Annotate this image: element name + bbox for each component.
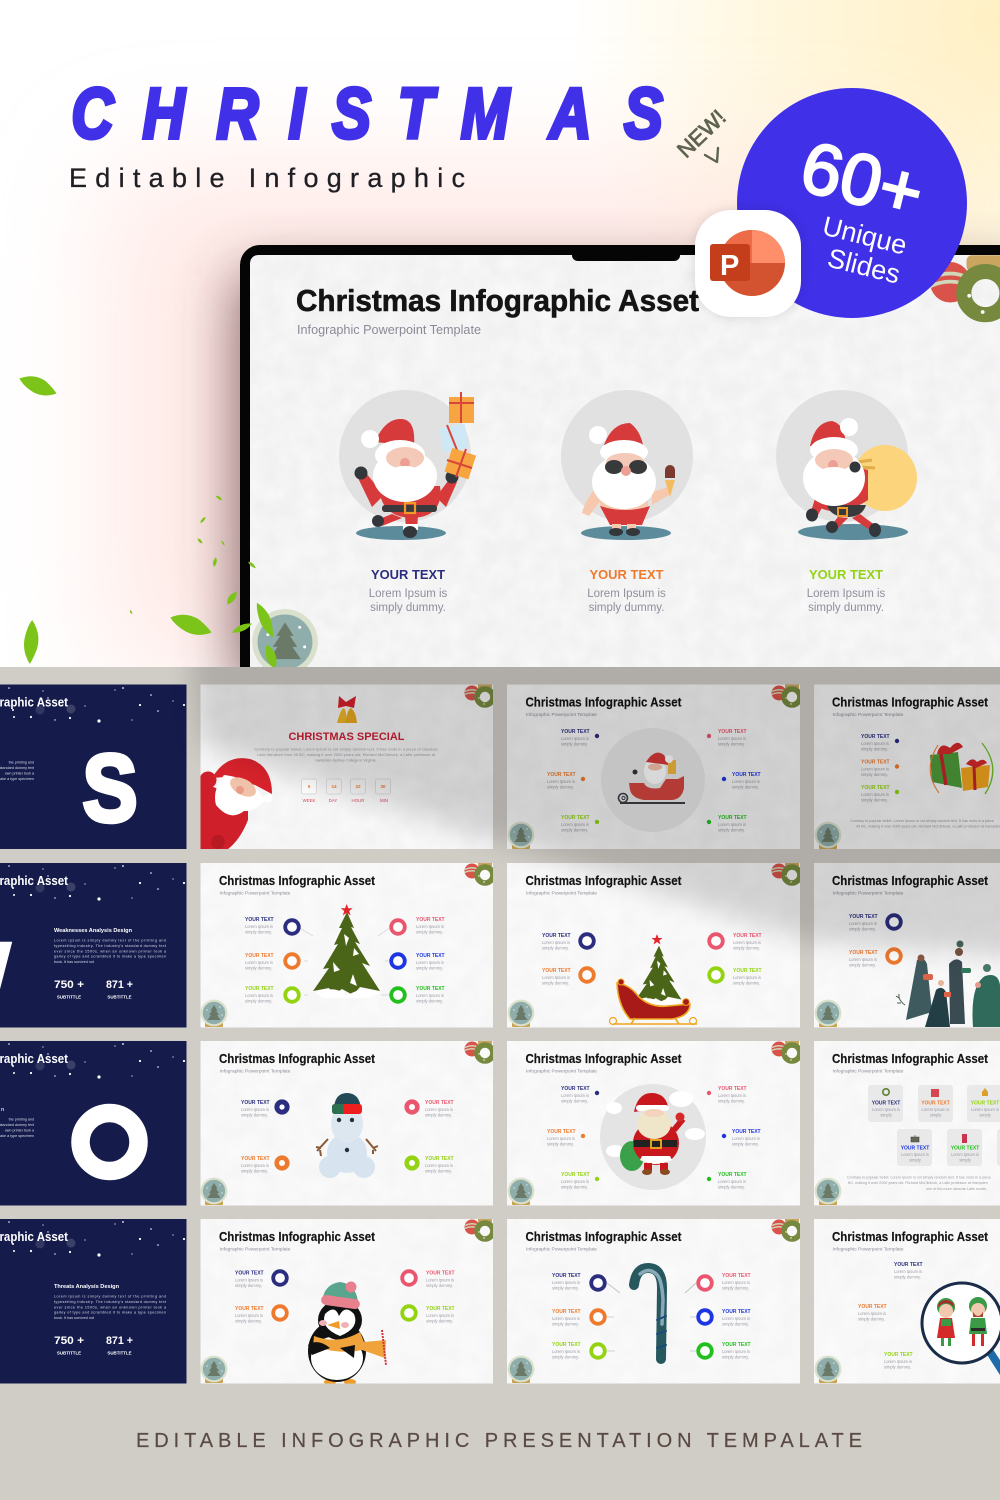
cards: simply — [880, 1112, 893, 1117]
callouts: YOUR TEXT — [718, 1086, 747, 1092]
caption 2: simply dummy. — [589, 602, 664, 614]
body fragment: the printing and — [9, 760, 34, 764]
body fragment: standard dummy text — [0, 1123, 34, 1127]
cards: Lorem Ipsum is — [971, 1107, 999, 1112]
slide: santa with green sack — [507, 1041, 800, 1206]
caption 1 — [369, 567, 448, 614]
stat 2: SUBTITTLE — [107, 995, 132, 1000]
slide: gift — [814, 684, 1000, 849]
callouts: simply dummy. — [426, 1318, 453, 1323]
slide: santa with green sack: Infographic Powerpoint Template — [526, 1068, 597, 1074]
countdown: HOUR — [352, 798, 364, 803]
callouts: Lorem Ipsum is — [245, 960, 273, 965]
slide: penguin: Infographic Powerpoint Template — [220, 1246, 291, 1252]
callouts: simply dummy. — [235, 1283, 262, 1288]
analysis heading: Threats Analysis Design — [54, 1284, 119, 1290]
slide: tree: Christmas Infographic Asset — [219, 873, 376, 888]
heading: CHRISTMAS SPECIAL — [288, 731, 405, 743]
callouts: Lorem Ipsum is — [561, 736, 589, 741]
body fragment: the printing and — [9, 1118, 34, 1122]
badge 60+: 60+ — [793, 127, 931, 234]
slide: candy cane — [507, 1219, 800, 1384]
callouts: YOUR TEXT — [425, 1100, 454, 1106]
analysis heading: Weaknesses Analysis Design — [54, 928, 132, 934]
callouts: YOUR TEXT — [245, 953, 274, 959]
badge label unique slides: Unique — [820, 211, 910, 261]
callouts: simply dummy. — [858, 1316, 885, 1321]
callouts: YOUR TEXT — [849, 950, 878, 956]
callouts: simply dummy. — [722, 1354, 749, 1359]
slide: elves magnifier: Infographic Powerpoint Template — [832, 1246, 904, 1252]
callouts: YOUR TEXT — [884, 1352, 913, 1358]
cards: Lorem Ipsum is — [901, 1152, 929, 1157]
callouts: YOUR TEXT — [561, 729, 590, 735]
callouts: simply dummy. — [426, 1283, 453, 1288]
callouts: simply dummy. — [561, 827, 588, 832]
callouts: simply dummy. — [861, 797, 888, 802]
callouts: YOUR TEXT — [733, 933, 762, 939]
powerpoint badge circle — [737, 88, 967, 318]
illustration: red sleigh with tree — [610, 934, 697, 1024]
callouts: Lorem Ipsum is — [241, 1163, 269, 1168]
decorative leaves behind laptop — [17, 371, 239, 664]
callouts: simply dummy. — [552, 1354, 579, 1359]
callouts: YOUR TEXT — [235, 1270, 264, 1276]
body: one of the more obscure Latin words, — [926, 1187, 987, 1191]
callouts: simply dummy. — [542, 980, 569, 985]
santa carrying sack — [776, 390, 917, 540]
icon: powerpoint: P — [720, 250, 739, 282]
callouts: Lorem Ipsum is — [426, 1313, 454, 1318]
callouts: Lorem Ipsum is — [547, 779, 575, 784]
callouts: YOUR TEXT — [241, 1100, 270, 1106]
body: Latin literature from 45 BC, making it over 2000 years old. Richard McClintock, a Latin professor at — [257, 753, 435, 757]
callouts: simply dummy. — [241, 1112, 268, 1117]
callouts — [547, 729, 761, 832]
callouts: Lorem Ipsum is — [416, 960, 444, 965]
callouts: YOUR TEXT — [547, 772, 576, 778]
analysis body — [54, 1294, 167, 1320]
callouts: YOUR TEXT — [894, 1262, 923, 1268]
callouts: Lorem Ipsum is — [425, 1163, 453, 1168]
callouts: Lorem Ipsum is — [552, 1349, 580, 1354]
illustration: christmas tree — [313, 904, 381, 998]
callouts: Lorem Ipsum is — [426, 1278, 454, 1282]
callouts: YOUR TEXT — [732, 1129, 761, 1135]
callouts: YOUR TEXT — [547, 1129, 576, 1135]
callouts: Lorem Ipsum is — [861, 766, 889, 772]
slide: three kings — [814, 863, 1000, 1028]
analysis body: galley of type and scrambled it to make a type specimen — [54, 955, 166, 959]
cards: simply — [930, 1112, 942, 1117]
callouts: simply dummy. — [552, 1285, 579, 1290]
santa with sunglasses and ice cream — [561, 390, 693, 540]
callouts: YOUR TEXT — [552, 1342, 581, 1348]
callouts: simply dummy. — [416, 998, 443, 1003]
callouts: Lorem Ipsum is — [416, 924, 444, 929]
callouts: simply dummy. — [241, 1168, 268, 1173]
callouts — [552, 1273, 751, 1359]
caption 2 — [587, 567, 666, 614]
badge label unique slides: Slides — [825, 243, 903, 290]
countdown: 14 — [331, 784, 337, 789]
analysis body: galley of type and scrambled it to make a type specimen — [54, 1311, 166, 1315]
callouts: YOUR TEXT — [858, 1304, 887, 1310]
callouts: YOUR TEXT — [542, 933, 571, 939]
callouts: simply dummy. — [416, 929, 443, 934]
slide: sleigh with tree — [507, 863, 800, 1028]
body fragment — [0, 1107, 35, 1138]
body fragment: own printer took a — [5, 772, 35, 776]
analysis body: typesetting industry. The industry's standard dummy text — [54, 944, 166, 948]
slide: cards — [814, 1041, 1000, 1206]
countdown: MIN — [380, 798, 388, 803]
body fragment: standard dummy text — [0, 766, 34, 770]
callouts: simply dummy. — [733, 980, 760, 985]
callouts: YOUR TEXT — [561, 815, 590, 821]
callouts: Lorem Ipsum is — [542, 975, 570, 980]
callouts: simply dummy. — [425, 1168, 452, 1173]
caption 3 — [807, 567, 886, 614]
callouts: Lorem Ipsum is — [245, 993, 273, 998]
subtitle: Editable Infographic — [69, 163, 465, 193]
callouts: YOUR TEXT — [561, 1086, 590, 1092]
callouts: simply dummy. — [849, 962, 876, 967]
cards: simply — [959, 1157, 972, 1162]
stat 1 — [54, 1335, 84, 1356]
callouts: simply dummy. — [861, 746, 888, 751]
bottom panel — [0, 667, 1000, 1500]
callouts: YOUR TEXT — [425, 1156, 454, 1162]
callouts: simply dummy. — [245, 965, 272, 970]
callouts: Lorem Ipsum is — [241, 1107, 269, 1112]
slide: tree — [200, 863, 493, 1028]
analysis body: typesetting industry. The industry's standard dummy text — [54, 1300, 166, 1304]
body — [847, 1176, 991, 1191]
callouts: simply dummy. — [718, 1098, 745, 1103]
dark slide: letter O — [0, 1041, 186, 1206]
callouts: Lorem Ipsum is — [718, 1093, 746, 1098]
callouts: YOUR TEXT — [426, 1306, 455, 1312]
slide: sleigh santa — [507, 684, 800, 849]
body: Contrary to popular belief, Lorem Ipsum is not simply random text. It has roots in a piece of classical — [254, 748, 438, 752]
callouts: YOUR TEXT — [426, 1270, 455, 1276]
callouts: Lorem Ipsum is — [547, 1136, 575, 1141]
big letter — [80, 1113, 138, 1171]
callouts: YOUR TEXT — [733, 968, 762, 974]
slide: christmas special — [200, 684, 493, 849]
callouts: YOUR TEXT — [849, 914, 878, 920]
big letter: S — [82, 734, 138, 841]
dark slide: letter S — [0, 684, 186, 849]
stat 2: 871 + — [106, 979, 133, 991]
cards: simply — [979, 1112, 992, 1117]
callouts: simply dummy. — [552, 1321, 579, 1326]
callouts: YOUR TEXT — [241, 1156, 270, 1162]
caption 1: simply dummy. — [370, 602, 446, 614]
body — [254, 748, 438, 762]
callouts: simply dummy. — [425, 1112, 452, 1117]
callouts: Lorem Ipsum is — [542, 940, 570, 945]
caption 2: YOUR TEXT — [590, 567, 664, 582]
callouts: Lorem Ipsum is — [858, 1311, 886, 1316]
body fragment — [0, 760, 35, 781]
callouts — [235, 1270, 455, 1323]
callouts: simply dummy. — [542, 945, 569, 950]
illustration: three kings — [896, 940, 1000, 1027]
title: CHRISTMAS — [71, 73, 663, 153]
slide: snowman: Christmas Infographic Asset — [219, 1051, 376, 1066]
analysis body: ever since the 1500s, when an unknown printer took a — [54, 1305, 167, 1309]
callouts: simply dummy. — [547, 1141, 574, 1146]
badge label unique slides — [820, 211, 910, 290]
callouts: simply dummy. — [245, 998, 272, 1003]
dark slide: threats — [0, 1219, 186, 1384]
callouts: simply dummy. — [733, 945, 760, 950]
stat 2: 871 + — [106, 1335, 133, 1347]
stat 2 — [106, 979, 133, 1000]
body: Contrary to popular belief, Lorem Ipsum is not simply random text. It has roots in a piece — [847, 1176, 991, 1180]
callouts: Lorem Ipsum is — [733, 975, 761, 980]
cards: YOUR TEXT — [951, 1146, 979, 1152]
callouts: YOUR TEXT — [245, 917, 274, 923]
slide: candy cane: Christmas Infographic Asset — [526, 1229, 682, 1244]
callouts: Lorem Ipsum is — [722, 1349, 750, 1354]
diagonal window shadow over slides — [183, 667, 1000, 964]
callouts: Lorem Ipsum is — [861, 792, 889, 797]
cards: Lorem Ipsum is — [922, 1107, 949, 1112]
callouts: simply dummy. — [416, 965, 443, 970]
NEW handwritten note: NEW! — [672, 105, 731, 163]
callouts: YOUR TEXT — [416, 917, 445, 923]
cards: Lorem Ipsum is — [951, 1152, 979, 1157]
illustration: penguin — [308, 1282, 386, 1385]
callouts: simply dummy. — [235, 1318, 262, 1323]
callouts — [547, 1086, 761, 1189]
callouts: YOUR TEXT — [861, 734, 890, 740]
slide subheading: Infographic Powerpoint Template — [297, 322, 481, 337]
callouts: Lorem Ipsum is — [561, 1179, 589, 1184]
illustration: snowman — [316, 1093, 378, 1178]
cards — [868, 1085, 1000, 1166]
stat 1: 750 + — [54, 979, 84, 991]
slide: santa with green sack: Christmas Infographic Asset — [526, 1051, 682, 1066]
illustration: gifts — [930, 743, 993, 794]
analysis body: Lorem Ipsum is simply dummy text of the printing and — [54, 1294, 166, 1298]
callouts: YOUR TEXT — [718, 729, 747, 735]
callouts: Lorem Ipsum is — [561, 822, 589, 827]
santa peeking — [200, 758, 272, 849]
callouts: YOUR TEXT — [861, 760, 890, 766]
cards: YOUR TEXT — [921, 1100, 950, 1106]
callouts: simply dummy. — [547, 784, 574, 789]
stat 2: SUBTITTLE — [107, 1351, 132, 1356]
callouts: simply dummy. — [849, 926, 876, 931]
callouts: YOUR TEXT — [722, 1309, 751, 1315]
callouts: simply dummy. — [722, 1321, 749, 1326]
stat 1 — [54, 979, 84, 1000]
callouts: YOUR TEXT — [416, 953, 445, 959]
analysis body: book. It has survived not — [54, 960, 94, 964]
snow globe decoration — [252, 609, 318, 676]
stat 2 — [106, 1335, 133, 1356]
illustration: santa in sleigh — [601, 728, 705, 832]
callouts: simply dummy. — [718, 1184, 745, 1189]
countdown — [302, 779, 390, 803]
body: BC, making it over 2000 years old. Richard McClintock, a Latin professor at Hampden — [848, 1181, 988, 1185]
callouts — [542, 933, 762, 985]
callouts — [849, 914, 901, 967]
callouts: Lorem Ipsum is — [733, 940, 761, 945]
callouts — [861, 734, 899, 802]
callouts: YOUR TEXT — [732, 772, 761, 778]
callouts: simply dummy. — [718, 741, 745, 746]
body: Hampden-Sydney College in Virginia. — [315, 758, 377, 762]
laptop mockup — [240, 245, 1000, 705]
analysis body: Lorem Ipsum is simply dummy text of the printing and — [54, 938, 166, 942]
callouts: YOUR TEXT — [552, 1273, 581, 1279]
callouts: Lorem Ipsum is — [552, 1316, 580, 1321]
callouts — [245, 917, 445, 1003]
callouts: Lorem Ipsum is — [732, 779, 760, 784]
caption 2: Lorem Ipsum is — [587, 588, 666, 600]
callouts: Lorem Ipsum is — [552, 1280, 580, 1285]
body fragment: own printer took a — [5, 1128, 35, 1132]
callouts: Lorem Ipsum is — [732, 1136, 760, 1141]
countdown: WEEK — [303, 798, 316, 803]
stat 1: SUBTITTLE — [57, 1351, 81, 1356]
callouts: Lorem Ipsum is — [884, 1359, 912, 1364]
analysis body: book. It has survived not — [54, 1316, 94, 1320]
callouts: Lorem Ipsum is — [849, 921, 877, 926]
slide: gift: Infographic Powerpoint Template — [832, 712, 904, 717]
callouts: YOUR TEXT — [722, 1273, 751, 1279]
callouts: YOUR TEXT — [542, 968, 571, 974]
dark slide: letter W — [0, 863, 186, 1035]
icon: bells — [337, 696, 357, 723]
callouts: simply dummy. — [561, 741, 588, 746]
callouts: YOUR TEXT — [561, 1172, 590, 1178]
slide: snowman — [200, 1041, 493, 1206]
callouts: simply dummy. — [718, 827, 745, 832]
callouts: YOUR TEXT — [722, 1342, 751, 1348]
footer caption: EDITABLE INFOGRAPHIC PRESENTATION TEMPALATE — [136, 1430, 862, 1452]
countdown: 30 — [380, 784, 386, 789]
slide: candy cane: Infographic Powerpoint Template — [526, 1246, 597, 1252]
caption 3: simply dummy. — [808, 602, 884, 614]
callouts: YOUR TEXT — [245, 986, 274, 992]
callouts: Lorem Ipsum is — [235, 1313, 263, 1318]
body: 45 BC, making it over 2000 years old. Richard McClintock, a Latin professor at Hampden — [856, 824, 1000, 828]
cards: simply — [909, 1157, 922, 1162]
callouts: Lorem Ipsum is — [416, 993, 444, 998]
slide: tree: Infographic Powerpoint Template — [220, 890, 291, 896]
body fragment: n — [1, 1107, 4, 1113]
cards: Lorem Ipsum is — [872, 1107, 900, 1112]
callouts: simply dummy. — [884, 1364, 911, 1369]
callouts: YOUR TEXT — [861, 785, 890, 791]
wreath decoration — [930, 255, 1000, 315]
callouts: YOUR TEXT — [235, 1306, 264, 1312]
slide: three kings: Infographic Powerpoint Template — [832, 890, 904, 896]
illustration: santa — [600, 1084, 706, 1190]
body: Contrary to popular belief, Lorem Ipsum is not simply random text. It has roots in a piece — [850, 819, 994, 823]
callouts: simply dummy. — [722, 1285, 749, 1290]
slide: cards: Infographic Powerpoint Template — [832, 1068, 904, 1074]
callouts: YOUR TEXT — [718, 1172, 747, 1178]
slide: sleigh santa: Christmas Infographic Asset — [526, 694, 682, 710]
caption 3: YOUR TEXT — [809, 567, 883, 582]
slide: sleigh with tree: Christmas Infographic Asset — [526, 873, 682, 888]
cards: YOUR TEXT — [971, 1100, 999, 1106]
slide: sleigh santa: Infographic Powerpoint Template — [526, 712, 597, 717]
callouts: Lorem Ipsum is — [849, 957, 877, 962]
analysis body — [54, 938, 167, 964]
callouts: simply dummy. — [561, 1184, 588, 1189]
stat 1: SUBTITTLE — [57, 995, 81, 1000]
illustration: magnifier with elves — [922, 1283, 1000, 1380]
slide: penguin — [200, 1219, 493, 1384]
illustration: candy cane — [634, 1268, 666, 1359]
callouts: simply dummy. — [894, 1274, 921, 1279]
countdown: DAY — [329, 798, 337, 803]
callouts: Lorem Ipsum is — [425, 1107, 453, 1112]
santa with gifts — [339, 390, 476, 540]
slide heading: Christmas Infographic Asset — [296, 283, 699, 318]
caption 3: Lorem Ipsum is — [807, 588, 886, 600]
slide: elves magnifier — [814, 1219, 1000, 1384]
callouts — [858, 1262, 923, 1369]
analysis body: ever since the 1500s, when an unknown printer took a — [54, 949, 167, 953]
stat 1: 750 + — [54, 1335, 84, 1347]
cards: YOUR TEXT — [872, 1100, 900, 1106]
callouts: simply dummy. — [732, 784, 759, 789]
caption 1: Lorem Ipsum is — [369, 588, 448, 600]
callouts: Lorem Ipsum is — [894, 1269, 922, 1274]
callouts: Lorem Ipsum is — [245, 924, 273, 929]
callouts: simply dummy. — [732, 1141, 759, 1146]
callouts: Lorem Ipsum is — [722, 1280, 750, 1285]
cards: YOUR TEXT — [901, 1146, 929, 1152]
callouts: Lorem Ipsum is — [561, 1093, 589, 1098]
callouts: YOUR TEXT — [552, 1309, 581, 1315]
caption 1: YOUR TEXT — [371, 567, 445, 582]
callouts: Lorem Ipsum is — [718, 822, 746, 827]
leaves over laptop — [231, 561, 280, 671]
callouts: Lorem Ipsum is — [861, 741, 889, 746]
callouts: Lorem Ipsum is — [718, 1179, 746, 1184]
countdown: 22 — [355, 784, 361, 789]
callouts: simply dummy. — [245, 929, 272, 934]
callouts: simply dummy. — [861, 772, 888, 777]
callouts: YOUR TEXT — [416, 986, 445, 992]
callouts: Lorem Ipsum is — [718, 736, 746, 741]
callouts — [241, 1099, 454, 1173]
slide: snowman: Infographic Powerpoint Template — [220, 1068, 291, 1074]
callouts: Lorem Ipsum is — [235, 1278, 263, 1282]
slide: sleigh with tree: Infographic Powerpoint Template — [526, 890, 597, 896]
callouts: YOUR TEXT — [718, 815, 747, 821]
callouts: simply dummy. — [561, 1098, 588, 1103]
body — [850, 819, 1000, 828]
icon: powerpoint — [695, 210, 801, 317]
slide: penguin: Christmas Infographic Asset — [219, 1229, 376, 1244]
callouts: Lorem Ipsum is — [722, 1316, 750, 1321]
countdown: 5 — [308, 784, 311, 789]
